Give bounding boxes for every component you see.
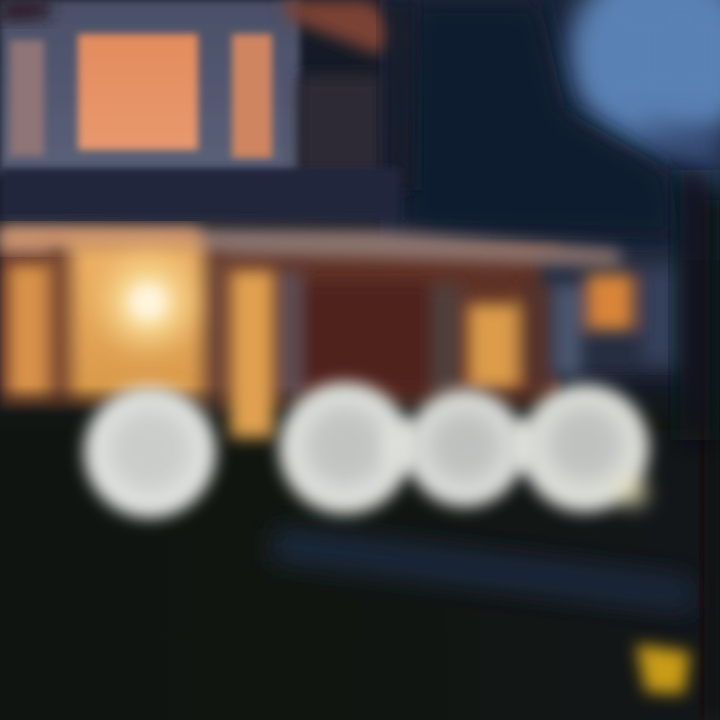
brown door [278,270,460,400]
right windows [468,270,678,388]
upper windows [10,34,272,158]
smart light circle 1 [84,386,216,518]
smart light circle 4 [521,384,649,512]
yellow badge [636,644,690,694]
porch body [0,245,685,410]
porch lamp [106,260,190,344]
floor band [0,168,400,220]
upper floor facade [0,0,415,190]
ground and shrubs [0,170,720,720]
lit porch column [230,270,274,438]
porch roof [0,226,620,266]
smart light circle 2 [279,382,411,514]
roof mass [400,0,680,240]
sky [380,0,720,260]
connector glow [385,420,543,472]
smart light circle 3 [406,389,524,507]
lit door [8,245,227,420]
